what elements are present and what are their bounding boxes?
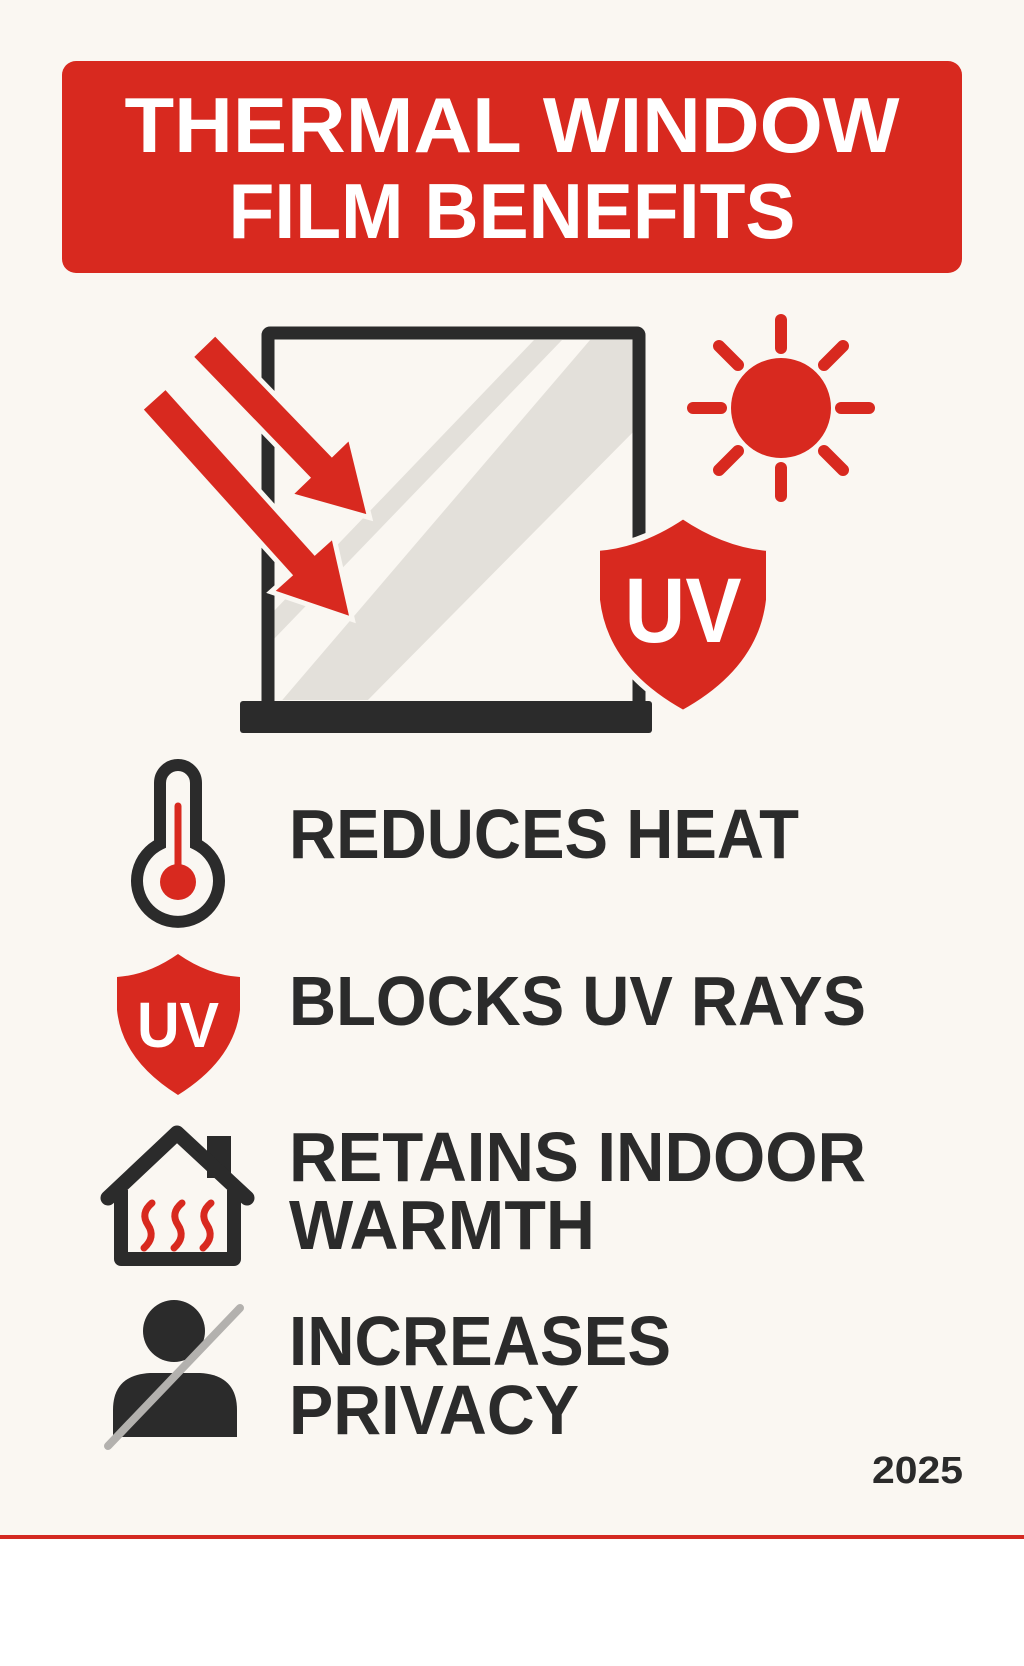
illustration: window with film [240,333,652,733]
benefit 1: reduces heat [137,765,799,922]
icon: UV shield small [117,954,240,1095]
benefit 1: reduces heat: REDUCES HEAT [289,795,799,873]
benefit 2: blocks UV: BLOCKS UV RAYS [289,962,866,1040]
benefit 4: privacy [108,1300,671,1449]
title banner: THERMAL WINDOW [124,81,900,169]
icon: sun [693,320,869,496]
benefit 3: retains warmth [108,1118,866,1264]
title banner [62,61,962,273]
year label: 2025 [872,1450,963,1492]
icon: house with heat [108,1133,247,1259]
benefit 2: blocks UV [117,954,866,1095]
icon: UV shield large: UV [624,560,742,662]
icon: UV shield small: UV [137,989,219,1061]
benefit 3: retains warmth: RETAINS INDOOR [289,1118,866,1196]
arrows: sun rays hitting window [122,316,400,648]
benefit 4: privacy: INCREASES [289,1302,671,1380]
benefit 4: privacy: PRIVACY [289,1371,579,1449]
icon: UV shield large [597,516,769,713]
icon: person crossed [108,1300,240,1446]
benefit 3: retains warmth: WARMTH [289,1186,595,1264]
icon: thermometer [137,765,219,922]
title banner: FILM BENEFITS [228,167,796,255]
